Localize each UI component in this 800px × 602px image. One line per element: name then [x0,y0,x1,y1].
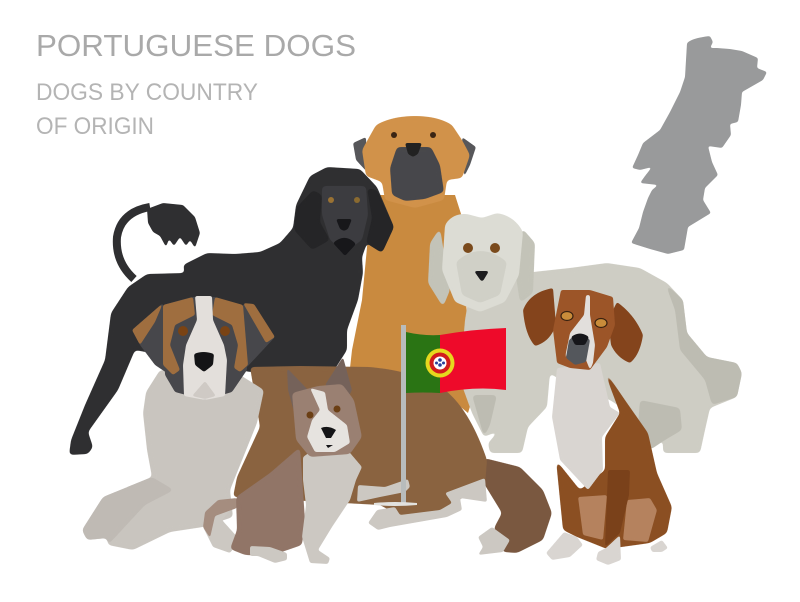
boxer blaze [564,295,595,370]
tail tip [478,527,510,555]
black dog tail [117,207,150,279]
St Bernard dog [82,296,275,550]
St Bernard muzzle shade [192,381,216,399]
boxer muzzle [566,335,590,365]
mastiff muzzle [390,147,444,201]
terrier ears [287,357,352,412]
boxer ears [523,288,643,363]
grey dog eyes and nose [463,243,500,281]
terrier raised arm [357,479,410,502]
flag coat of arms [426,348,454,378]
brown lying dog tail [478,458,552,555]
mastiff body [350,195,472,413]
terrier dog [203,357,410,564]
flag pole [401,325,406,503]
black dog ears [294,188,394,253]
boxer front leg [605,470,630,547]
tail fur [483,458,552,553]
grey dog head [442,213,523,312]
black dog eyes and nose [328,197,360,256]
flag red [440,328,506,393]
grey dog body [460,263,742,453]
boxer eyes [561,312,607,328]
subtitle [36,79,258,140]
mastiff head [362,116,470,208]
title: PORTUGUESE DOGS [36,28,356,63]
mastiff ears [353,137,476,177]
St Bernard brown patches [163,297,248,375]
St Bernard body [82,370,264,550]
flag base [374,502,417,506]
grey dog ears [428,228,535,307]
terrier face [307,388,350,452]
boxer dog [523,288,672,565]
boxer body [556,368,672,549]
terrier head [292,384,362,457]
boxer paws [546,532,668,565]
boxer thighs [578,495,657,542]
boxer chest [552,363,620,490]
flag on pole [374,325,506,506]
grey dog muzzle fur [456,251,507,303]
terrier back foot [250,546,287,563]
St Bernard leg shading [82,477,174,545]
flag green [406,332,440,393]
black dog body [69,167,394,455]
mastiff nose [405,143,422,157]
St Bernard ears [132,303,275,375]
black dog face [322,186,368,252]
subtitle: OF ORIGIN [36,113,154,140]
St Bernard nose [194,352,214,372]
St Bernard eyes [178,326,230,336]
black dog tail tuft [147,203,200,248]
terrier eyes and nose [306,406,340,448]
subtitle: DOGS BY COUNTRY [36,79,258,106]
black dog [69,167,394,455]
map of Portugal [631,36,767,254]
terrier chest [302,445,362,564]
brown lying dog body [233,366,487,516]
mastiff dog [350,116,476,413]
grey long-haired dog [428,213,742,453]
terrier tail [203,498,240,553]
grey dog shading [472,283,742,450]
St Bernard head [163,297,247,400]
terrier body [230,447,305,556]
mastiff eyes [391,132,436,138]
boxer nose [571,334,589,345]
brown dog belly fur and paw [368,478,487,530]
boxer head [553,290,615,370]
St Bernard blaze [183,296,227,400]
